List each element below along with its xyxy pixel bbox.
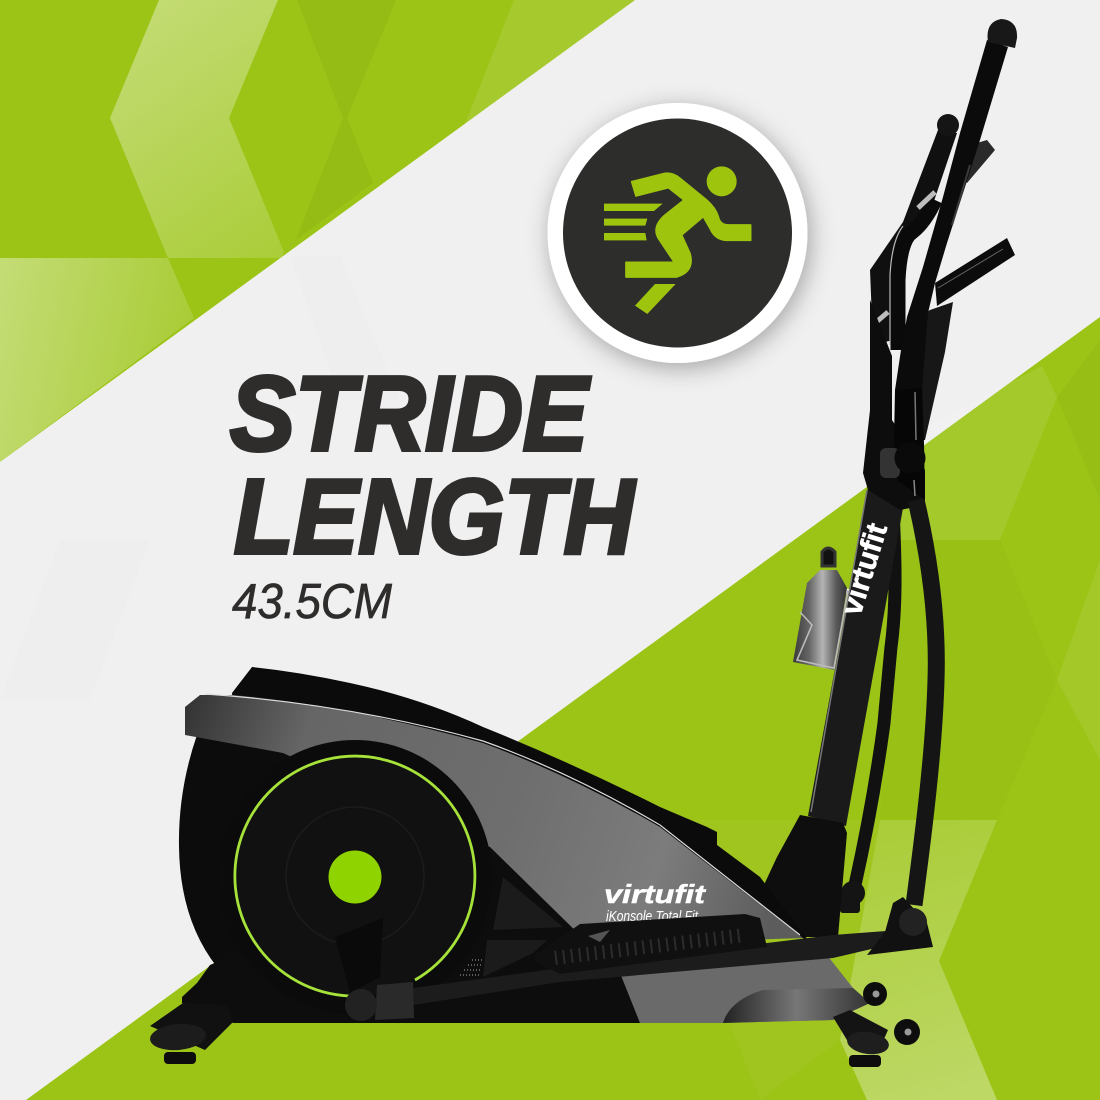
badge disc <box>548 103 808 363</box>
lower rear grey shell <box>618 950 870 1023</box>
small rear handle stub <box>955 140 995 183</box>
curved handle tube <box>898 200 935 350</box>
flywheel disc <box>236 758 474 996</box>
brand on column: virtufit <box>835 519 894 619</box>
panel: upper-left green triangle <box>0 0 635 462</box>
grey side panel <box>185 695 803 945</box>
pivot sleeve and knob <box>880 388 926 500</box>
main handle end cap <box>988 19 1017 48</box>
upper column bracket <box>863 300 925 510</box>
heading: stride length: STRIDE <box>230 355 591 473</box>
rear tube foot <box>840 881 865 913</box>
mesh dots <box>460 960 483 975</box>
side grip arm <box>905 238 1015 440</box>
foot pedal <box>535 914 767 974</box>
front pivot bracket <box>867 897 933 955</box>
green hub <box>328 850 382 904</box>
base frame <box>182 845 720 1023</box>
crank joint <box>345 982 414 1021</box>
green ring <box>235 756 475 996</box>
badge: running icon <box>548 103 808 363</box>
value: 43.5CM: 43.5CM <box>232 575 392 629</box>
heading: stride length <box>230 355 636 576</box>
elliptical trainer <box>149 19 1017 1067</box>
brand on housing: virtufit <box>604 879 707 909</box>
front stabiliser and wheels <box>833 982 920 1067</box>
panel: lower-right green triangle <box>26 317 1100 1100</box>
pedal arm <box>413 931 893 1005</box>
crank arm <box>335 918 383 993</box>
rear stabiliser foot <box>149 1003 233 1064</box>
front arch <box>723 988 870 1023</box>
column base <box>763 815 847 937</box>
handle end cap <box>937 114 959 136</box>
model name: iKonsole Total Fit <box>606 908 699 925</box>
top hood <box>232 667 808 940</box>
water bottle and cage <box>793 548 848 670</box>
brand on housing <box>604 879 707 925</box>
rear upright tube <box>855 510 895 885</box>
silver handle accents <box>874 192 935 324</box>
heading: stride length: LENGTH <box>234 458 636 576</box>
rear housing <box>179 735 500 1000</box>
icon: sprinting figure <box>604 166 751 314</box>
main handle tube <box>895 40 1008 390</box>
inner handle <box>870 130 957 345</box>
flywheel <box>218 740 492 1014</box>
front column <box>808 488 903 826</box>
speaker mesh panels <box>483 877 563 977</box>
front pedal tube <box>914 500 936 905</box>
